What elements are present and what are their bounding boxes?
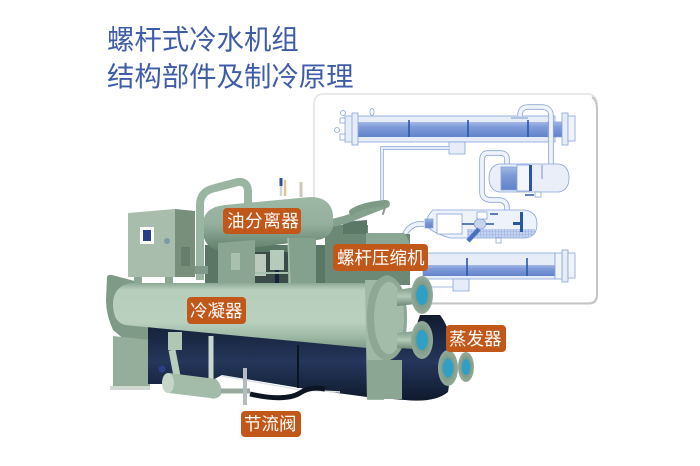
label: 蒸发器: 蒸发器 (449, 329, 502, 349)
schematic: compressor (425, 210, 537, 243)
nozzle flanges (397, 276, 474, 386)
title: 螺杆式冷水机组 (107, 24, 299, 55)
cabinet display (140, 227, 154, 244)
label: 冷凝器 (187, 297, 246, 324)
title: 结构部件及制冷原理 (107, 61, 354, 92)
schematic: piping (402, 107, 551, 246)
evaporator: insulated dark shell (148, 315, 453, 401)
schematic: condenser separator vessel (489, 164, 569, 197)
title (107, 24, 354, 92)
schematic: bottom heat exchanger (423, 250, 575, 291)
oil return pipe (189, 182, 248, 280)
oil separator vessel (203, 197, 333, 287)
label: 冷凝器: 冷凝器 (190, 301, 242, 321)
label: 蒸发器 (446, 325, 506, 352)
label: 节流阀: 节流阀 (244, 414, 296, 434)
evaporator leg and end plate (365, 275, 407, 400)
label: 节流阀 (241, 411, 301, 437)
left support bracket (106, 275, 150, 390)
valves on separator (281, 178, 301, 197)
compressor discharge pipe (326, 203, 386, 224)
label: 油分离器: 油分离器 (227, 211, 299, 231)
label: 螺杆压缩机 (333, 244, 428, 271)
label: 螺杆压缩机: 螺杆压缩机 (337, 248, 425, 268)
compressor body behind separator (205, 220, 411, 290)
condenser main cylinder (113, 283, 367, 348)
panel: refrigeration schematic (314, 94, 597, 304)
control cabinet (128, 209, 195, 285)
drain pipes and filter drier (158, 332, 325, 405)
schematic: top heat exchanger (334, 108, 575, 154)
machine: screw chiller (106, 178, 474, 405)
